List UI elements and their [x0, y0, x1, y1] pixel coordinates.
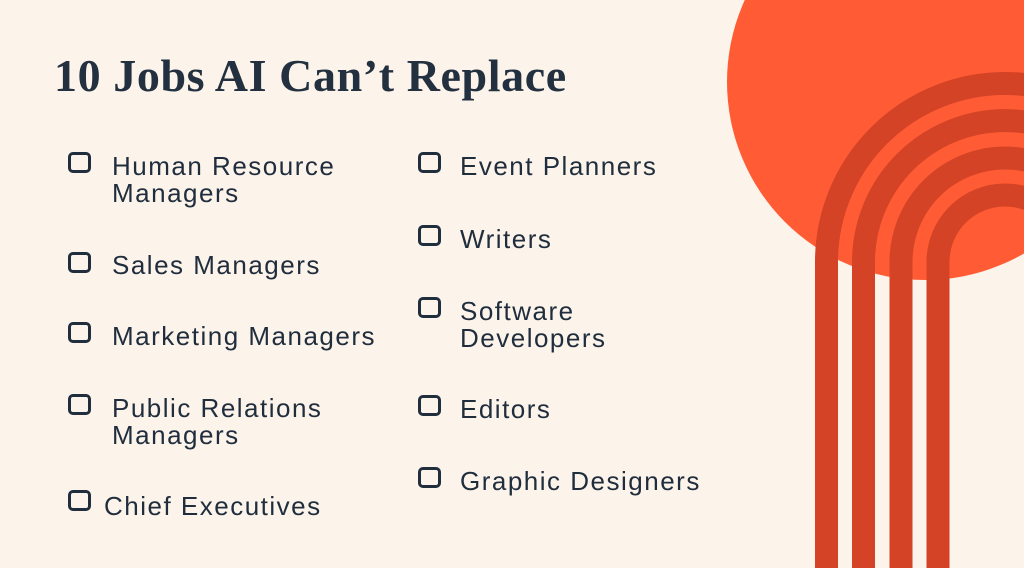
list: column 1: Sales Managers	[112, 250, 321, 280]
list: column 2: Graphic Designers	[460, 466, 701, 496]
list: column 1: Human Resource	[112, 151, 335, 181]
list: column 2: Writers	[460, 224, 552, 254]
list: column 2	[418, 151, 701, 496]
item	[418, 394, 551, 424]
list: column 2: Event Planners	[460, 151, 657, 181]
item	[418, 296, 607, 353]
item	[68, 321, 376, 351]
list: column 1: Managers	[112, 420, 240, 450]
list: column 2: Software	[460, 296, 575, 326]
list: column 1: Managers	[112, 178, 240, 208]
list: column 1: Marketing Managers	[112, 321, 376, 351]
list: column 1: Chief Executives	[104, 491, 322, 521]
item	[68, 393, 322, 450]
title: 10 Jobs AI Can’t Replace	[54, 50, 567, 101]
list: column 2: Developers	[460, 323, 607, 353]
list: column 1	[68, 151, 376, 521]
item	[418, 466, 701, 496]
item	[68, 151, 335, 208]
item	[68, 490, 322, 521]
list: column 2: Editors	[460, 394, 551, 424]
item	[68, 250, 321, 280]
item	[418, 224, 552, 254]
list: column 1: Public Relations	[112, 393, 322, 423]
item	[418, 151, 657, 181]
